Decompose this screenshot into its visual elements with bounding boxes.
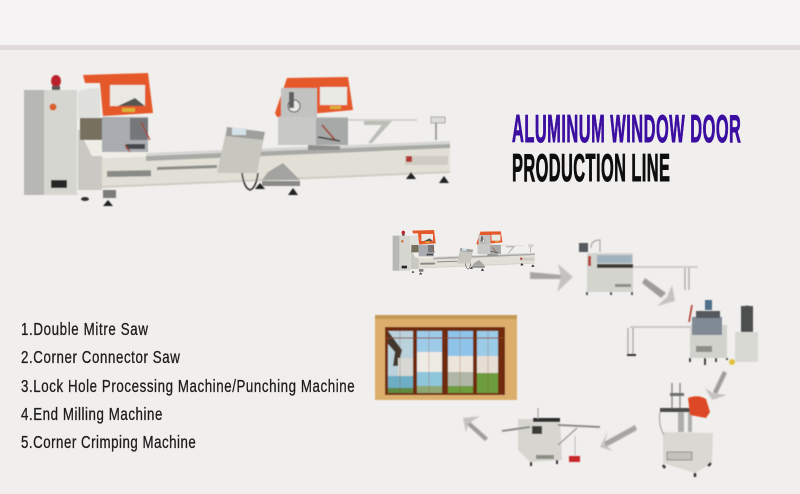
step 1: small double mitre saw [393, 230, 535, 274]
arrow: step 2 to 3 [642, 278, 675, 306]
machine list: 4.End Milling Machine [21, 405, 162, 425]
arrow: step 3 to 4 [705, 371, 727, 400]
arrow: step 1 to 2 [530, 264, 573, 292]
arrow: step 5 to finished window [463, 416, 488, 441]
machine list: 5.Corner Crimping Machine [21, 433, 196, 453]
main machine: double mitre saw [24, 73, 450, 206]
step 4: end milling machine [660, 383, 713, 477]
title: ALUMINUM WINDOW DOOR [512, 108, 741, 151]
header band [0, 45, 800, 50]
title: PRODUCTION LINE [512, 147, 670, 190]
top strip [0, 0, 800, 45]
step 2: corner connector saw [579, 240, 698, 295]
machine list: 1.Double Mitre Saw [21, 320, 149, 340]
finished sliding window [375, 315, 517, 400]
machine list: 3.Lock Hole Processing Machine/Punching Machine [21, 377, 355, 397]
step 5: corner crimping machine [502, 408, 600, 466]
machine list: 2.Corner Connector Saw [21, 348, 181, 368]
window panes [388, 331, 498, 393]
arrow: step 4 to 5 [600, 425, 637, 451]
step 3: lock hole processing machine and punching machine [627, 300, 758, 365]
title [512, 108, 741, 190]
machine list [21, 320, 355, 453]
